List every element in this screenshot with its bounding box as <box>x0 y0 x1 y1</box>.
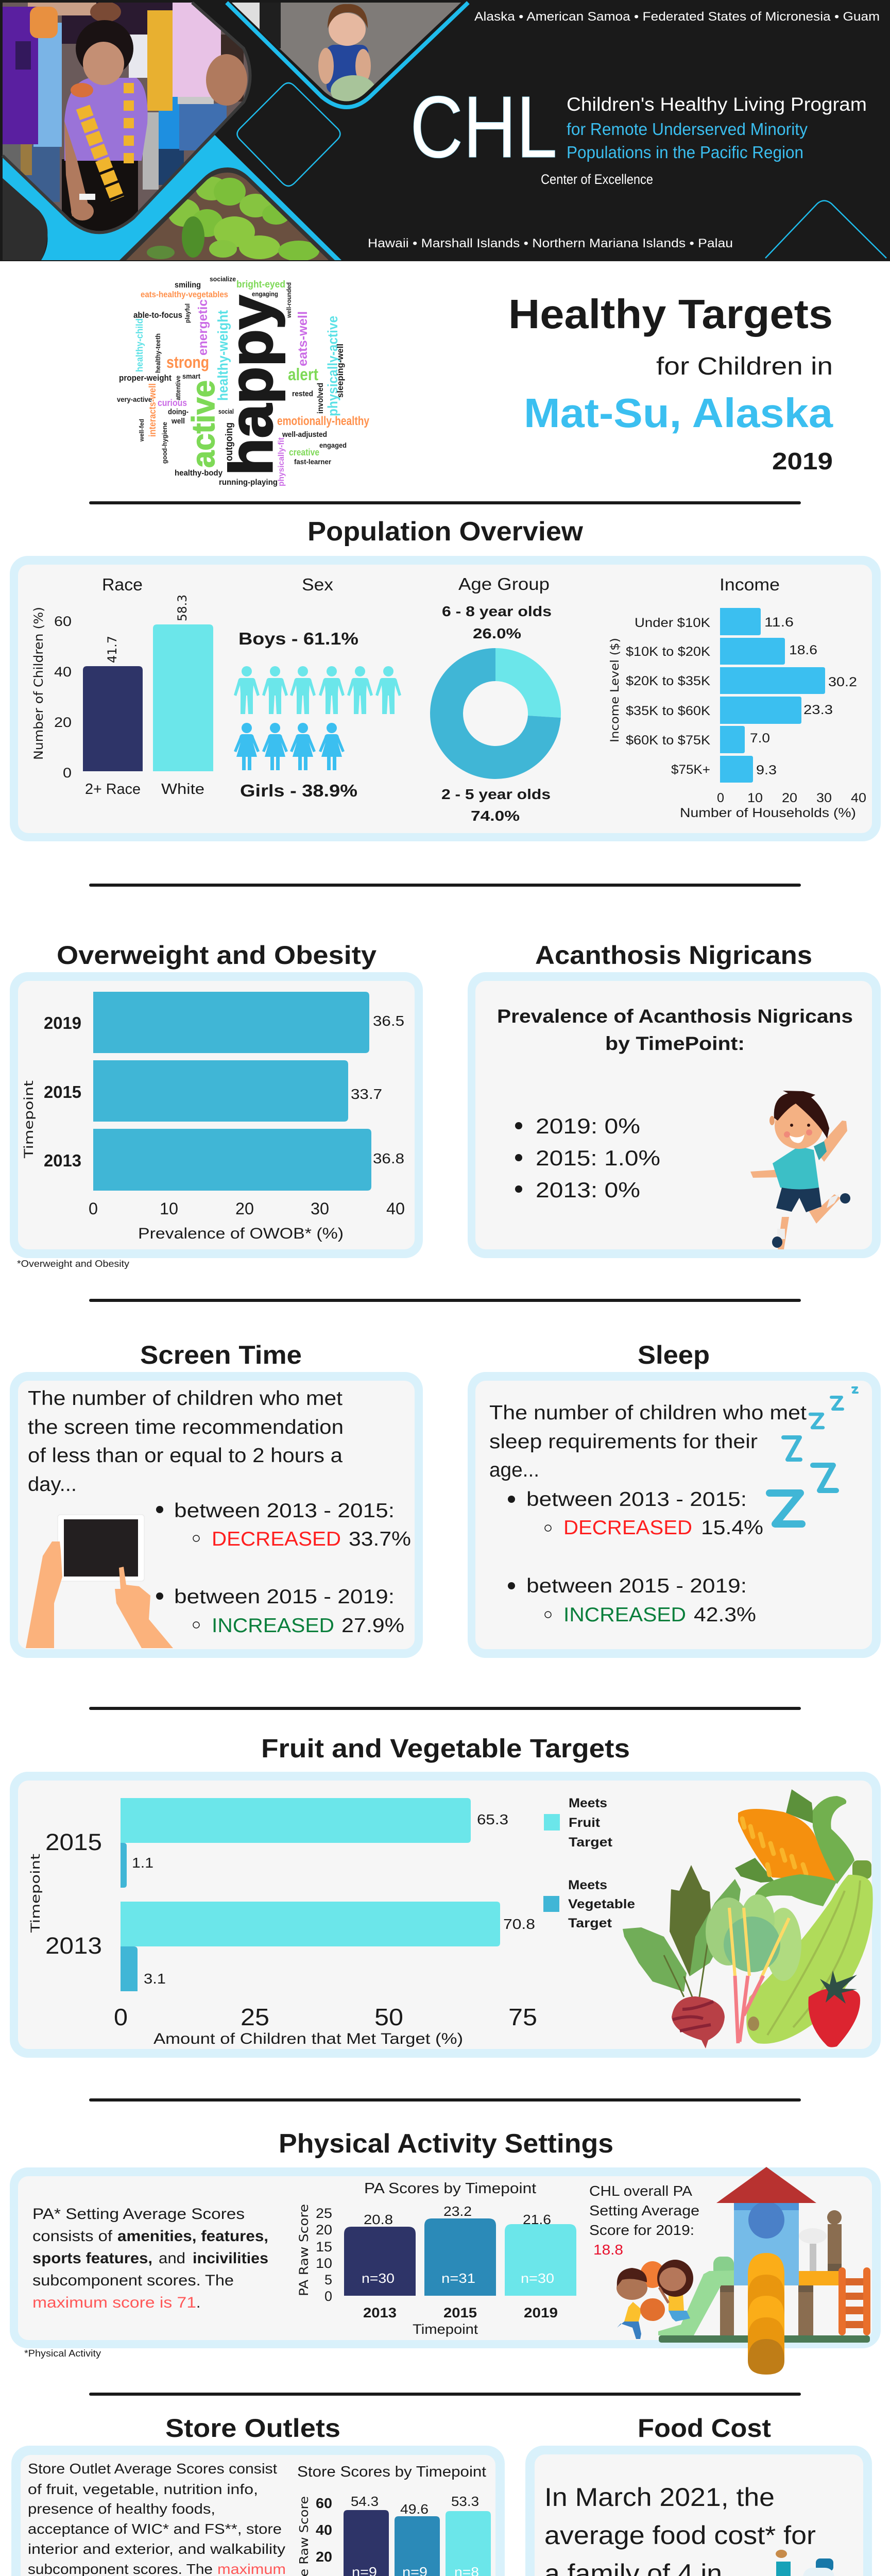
panel: food cost <box>525 2446 883 2576</box>
intro text <box>489 1402 807 1481</box>
bar chart: targets: 1.1 <box>132 1855 153 1871</box>
list: screen time changes: 27.9% <box>341 1615 404 1637</box>
icon: grocery bag <box>741 2550 883 2576</box>
bar chart: PA scores by timepoint: 2015 <box>443 2305 477 2320</box>
heading: Food Cost: Food Cost <box>638 2414 771 2443</box>
chart: race: 41.7 <box>105 636 119 663</box>
panel: store outlets <box>11 2446 505 2576</box>
word cloud: strong <box>166 353 209 371</box>
bar chart: PA scores by timepoint: PA Scores by Timepoint <box>364 2180 536 2197</box>
chart: income: $75K+ <box>671 762 710 777</box>
chart: race: Race <box>102 575 143 594</box>
list: sleep changes: 15.4% <box>701 1517 763 1539</box>
bar chart: store scores by timepoint <box>297 2464 491 2576</box>
word cloud: involved <box>316 383 325 414</box>
bar chart: OWOB prevalence <box>22 992 405 1242</box>
bar chart: PA scores by timepoint: n=30 <box>521 2270 554 2286</box>
chart: age group donut: 2 - 5 year olds <box>441 786 551 802</box>
chart: income: 40 <box>851 791 866 805</box>
chart: income <box>609 575 866 820</box>
chart: income: 30.2 <box>828 675 857 689</box>
bar chart: OWOB prevalence: 30 <box>311 1199 329 1218</box>
panel: physical activity settings <box>10 2167 881 2348</box>
list: screen time changes: 33.7% <box>349 1528 411 1550</box>
title block <box>508 291 833 474</box>
bar chart: targets: 3.1 <box>144 1971 166 1987</box>
legend: Meets <box>568 1878 607 1892</box>
bar chart: PA scores by timepoint: 20 <box>316 2222 332 2238</box>
panel: acanthosis nigricans <box>468 972 881 1258</box>
chart: race <box>31 575 213 798</box>
word cloud: playful <box>184 303 191 323</box>
bar chart: OWOB prevalence: 36.5 <box>373 1013 404 1029</box>
list: sleep changes: 42.3% <box>694 1604 756 1626</box>
word cloud: social <box>218 408 234 415</box>
word cloud: healthy-child <box>134 318 145 372</box>
chart: income: 23.3 <box>803 703 833 717</box>
icon: vegetables and fruit <box>623 1789 873 2048</box>
word cloud: well <box>171 417 185 426</box>
text: store description: of fruit, vegetable, nutrition info, <box>28 2481 258 2497</box>
panel: acanthosis nigricans: by TimePoint: <box>605 1033 745 1054</box>
bar chart: targets: 65.3 <box>477 1811 508 1827</box>
heading: Acanthosis Nigricans: Acanthosis Nigricans <box>535 941 812 970</box>
legend <box>543 1796 635 1930</box>
heading: Overweight and Obesity: Overweight and Obesity <box>57 941 376 970</box>
intro text: of less than or equal to 2 hours a <box>28 1445 343 1467</box>
chart: income: $20K to $35K <box>626 674 710 688</box>
callout: CHL overall PA score: Score for 2019: <box>589 2222 694 2238</box>
word cloud: rested <box>292 389 313 398</box>
list: sleep changes: INCREASED <box>563 1604 686 1626</box>
chart: income: 18.6 <box>789 643 817 657</box>
chart: race: 2+ Race <box>85 781 141 798</box>
text: food cost statement: In March 2021, the <box>544 2483 775 2512</box>
bar chart: PA scores by timepoint: 0 <box>324 2289 332 2304</box>
text: PA description: amenities, features, <box>117 2228 268 2245</box>
text: PA description: subcomponent scores. The <box>32 2272 234 2289</box>
intro text <box>28 1387 344 1496</box>
text: store description: interior and exterior, and walkability <box>28 2541 285 2557</box>
photo: toddler <box>232 3 461 101</box>
chart: race: Number of Children (%) <box>31 607 46 760</box>
word cloud: outgoing <box>224 422 235 461</box>
list: screen time changes: between 2013 - 2015: <box>174 1500 395 1522</box>
chart: income: Number of Households (%) <box>680 806 856 820</box>
heading: Physical Activity Settings: Physical Activity Settings <box>279 2129 613 2159</box>
word cloud: eats-well <box>296 311 310 366</box>
word cloud: physically-fit <box>277 437 286 486</box>
bar chart: OWOB prevalence: 33.7 <box>351 1086 382 1102</box>
word cloud: bright-eyed <box>236 279 285 290</box>
text: PA description: PA* Setting Average Scores <box>32 2206 245 2223</box>
chart: income: Income Level ($) <box>609 638 622 742</box>
callout: CHL overall PA score: Setting Average <box>589 2202 699 2218</box>
footnote: overweight: *Overweight and Obesity <box>17 1259 129 1269</box>
bar chart: OWOB prevalence: Timepoint <box>22 1080 36 1159</box>
chart: age group donut: 74.0% <box>471 808 520 824</box>
header islands top: Alaska • American Samoa • Federated States of Micronesia • Guam <box>474 10 880 24</box>
subtitle: for Children in: for Children in <box>656 353 833 380</box>
word cloud: curious <box>158 398 187 408</box>
legend: Fruit <box>569 1816 601 1830</box>
location: Mat-Su, Alaska: Mat-Su, Alaska <box>524 390 833 436</box>
chart: income: $60K to $75K <box>626 733 710 748</box>
icon: tablet and hands <box>26 1515 173 1648</box>
header islands bottom: Hawaii • Marshall Islands • Northern Mariana Islands • Palau <box>368 236 733 250</box>
heading: Population Overview: Population Overview <box>307 517 584 547</box>
bar chart: targets: 50 <box>374 2004 403 2030</box>
list: sleep changes: between 2015 - 2019: <box>526 1575 747 1597</box>
word cloud: active <box>186 380 221 468</box>
list: sleep changes <box>508 1488 763 1626</box>
icon: sleeping Z letters <box>769 1387 858 1524</box>
bar chart: store scores by timepoint: 54.3 <box>351 2494 379 2509</box>
callout: CHL overall PA score <box>589 2183 699 2258</box>
chart: income: 0 <box>717 791 724 805</box>
legend: Meets <box>569 1796 607 1810</box>
chart: race: 20 <box>54 715 72 730</box>
panel: sleep <box>468 1372 881 1658</box>
bar chart: PA scores by timepoint: 2013 <box>363 2305 397 2320</box>
chart: income: $10K to $20K <box>626 645 710 659</box>
bar chart: targets: 2015 <box>45 1829 102 1855</box>
heading: Sleep: Sleep <box>638 1341 710 1369</box>
list: screen time changes: DECREASED <box>212 1528 341 1550</box>
bar chart: targets: Timepoint <box>28 1854 43 1933</box>
word cloud <box>117 275 370 487</box>
chart: income: 10 <box>747 791 763 805</box>
word cloud: well-rounded <box>285 282 293 318</box>
word cloud: creative <box>289 447 319 457</box>
list: prevalence values: 2019: 0% <box>536 1114 640 1138</box>
bar chart: store scores by timepoint: Store Scores by Timepoint <box>297 2464 486 2480</box>
bar chart: PA scores by timepoint: 15 <box>316 2239 332 2255</box>
word cloud: healthy-weight <box>215 310 231 401</box>
bar chart: PA scores by timepoint: 10 <box>316 2256 332 2271</box>
list: prevalence values: 2013: 0% <box>536 1178 640 1202</box>
word cloud: energetic <box>196 299 210 355</box>
chart: race: 60 <box>54 614 72 629</box>
text: PA description: incivilities <box>193 2250 268 2267</box>
chart: race: 58.3 <box>175 595 190 621</box>
list: screen time changes: between 2015 - 2019: <box>174 1586 395 1608</box>
bar chart: OWOB prevalence: 40 <box>386 1199 405 1218</box>
bar chart: PA scores by timepoint: n=30 <box>362 2270 395 2286</box>
bar chart: PA scores by timepoint: 2019 <box>524 2305 558 2320</box>
word cloud: healthy-teeth <box>154 333 162 373</box>
word cloud: emotionally-healthy <box>277 414 370 428</box>
text: PA description: . <box>196 2294 200 2311</box>
callout: CHL overall PA score: 18.8 <box>593 2242 623 2258</box>
word cloud: interacts-well <box>147 383 158 437</box>
chart: race: White <box>161 781 204 798</box>
word cloud: very-active <box>117 395 152 403</box>
word cloud: fast-learner <box>294 457 332 466</box>
chart: sex <box>234 575 401 800</box>
word cloud: well-fed <box>138 419 145 442</box>
word cloud: alert <box>288 365 318 384</box>
intro text: sleep requirements for their <box>489 1431 758 1453</box>
list: prevalence values <box>515 1114 660 1202</box>
word cloud: proper-weight <box>119 373 172 383</box>
program subtitle line 1: for Remote Underserved Minority <box>567 120 808 139</box>
icon: playground with children <box>617 2167 870 2375</box>
bar chart: targets: 25 <box>241 2004 269 2030</box>
icon: diamond outline <box>237 83 340 186</box>
icon: boys <box>234 666 401 714</box>
icon: girls <box>234 723 345 770</box>
word cloud: able-to-focus <box>133 310 182 320</box>
word cloud: smart <box>182 372 200 380</box>
photo: lettuce garden <box>119 167 335 260</box>
bar chart: PA scores by timepoint: PA Raw Score <box>297 2204 311 2296</box>
program subtitle line 2: Populations in the Pacific Region <box>567 143 803 162</box>
chart: age group donut: 6 - 8 year olds <box>442 603 552 619</box>
legend: Target <box>568 1916 612 1930</box>
word cloud: sleeping-well <box>335 344 345 398</box>
word cloud: happy <box>217 295 285 476</box>
text: store description <box>28 2461 286 2576</box>
word cloud: engaging <box>252 290 278 298</box>
chart: income: 7.0 <box>750 731 770 745</box>
list: sleep changes: between 2013 - 2015: <box>526 1488 747 1511</box>
heading: Screen Time: Screen Time <box>140 1341 302 1369</box>
chart: income: 11.6 <box>764 615 794 630</box>
panel heading: Prevalence of Acanthosis Nigricans <box>497 1006 853 1027</box>
bar chart: PA scores by timepoint: n=31 <box>441 2270 475 2286</box>
bar chart: OWOB prevalence: 0 <box>89 1199 98 1218</box>
panel: overweight and obesity <box>10 972 423 1258</box>
chart: income: 9.3 <box>756 763 777 777</box>
bar chart: targets: 2013 <box>45 1933 102 1959</box>
bar chart: OWOB prevalence: 2019 <box>44 1013 81 1032</box>
panel: population overview <box>10 556 881 841</box>
text: store description: acceptance of WIC* and FS**, store <box>28 2521 282 2537</box>
bar chart: OWOB prevalence: 2015 <box>44 1082 81 1101</box>
word cloud: socialize <box>210 275 236 283</box>
legend: Target <box>569 1835 613 1850</box>
bar chart: OWOB prevalence: 2013 <box>44 1151 81 1170</box>
chart: age group donut <box>430 574 561 824</box>
bar chart: PA scores by timepoint: 21.6 <box>523 2212 551 2227</box>
footnote: physical activity: *Physical Activity <box>24 2348 101 2359</box>
word cloud: attentive <box>174 376 182 400</box>
word cloud: engaged <box>319 441 347 449</box>
chart: income: Under $10K <box>635 616 710 630</box>
word cloud: healthy-body <box>175 469 222 478</box>
bar chart: targets: 0 <box>114 2004 128 2030</box>
bar chart: PA scores by timepoint: 5 <box>324 2272 332 2287</box>
word cloud: doing- <box>168 408 189 416</box>
chart: income: 30 <box>816 791 832 805</box>
text: store description: Store Outlet Average Scores consist <box>28 2461 277 2477</box>
bar chart: targets <box>28 1798 537 2047</box>
heading: Fruit and Vegetable Targets: Fruit and Vegetable Targets <box>261 1734 630 1763</box>
text: food cost statement <box>544 2483 816 2576</box>
word cloud: eats-healthy-vegetables <box>141 290 228 299</box>
word cloud: well-adjusted <box>282 430 327 439</box>
panel: fruit and vegetable targets <box>10 1772 881 2058</box>
header banner <box>0 0 890 263</box>
text: PA description: and <box>159 2250 185 2267</box>
text: store description: presence of healthy foods, <box>28 2501 215 2517</box>
bar chart: PA scores by timepoint: 25 <box>316 2206 332 2221</box>
bar chart: OWOB prevalence: 10 <box>160 1199 178 1218</box>
list: prevalence values: 2015: 1.0% <box>536 1146 660 1170</box>
bar chart: store scores by timepoint: 49.6 <box>400 2501 429 2517</box>
bar chart: store scores by timepoint: 20 <box>316 2549 332 2565</box>
center of excellence: Center of Excellence <box>541 172 653 187</box>
list: sleep changes: DECREASED <box>563 1517 692 1539</box>
word cloud: running-playing <box>219 478 278 487</box>
bar chart: store scores by timepoint: 53.3 <box>451 2494 479 2509</box>
program name: Children's Healthy Living Program <box>567 94 867 115</box>
chart: sex: Sex <box>302 575 334 594</box>
text: PA description <box>32 2206 268 2311</box>
bar chart: store scores by timepoint: 60 <box>316 2495 332 2511</box>
word cloud: physically-active <box>325 316 340 416</box>
word cloud: good-hygiene <box>161 422 168 464</box>
chart: sex: Girls - 38.9% <box>240 781 357 800</box>
legend: Vegetable <box>568 1897 635 1911</box>
bar chart: targets: 75 <box>508 2004 537 2030</box>
list: screen time changes: INCREASED <box>212 1615 334 1637</box>
chart: income: 20 <box>782 791 797 805</box>
intro text: The number of children who met <box>28 1387 343 1410</box>
bar chart: PA scores by timepoint: Timepoint <box>413 2321 478 2337</box>
intro text: age... <box>489 1459 539 1481</box>
chart: sex: Boys - 61.1% <box>238 629 358 648</box>
intro text: day... <box>28 1473 77 1496</box>
text: PA description: consists of <box>32 2228 113 2245</box>
logo CHL: CHL <box>410 78 557 176</box>
text: food cost statement: average food cost* for <box>544 2521 816 2550</box>
title: Healthy Targets: Healthy Targets <box>508 291 833 337</box>
intro text: the screen time recommendation <box>28 1416 344 1438</box>
bar chart: OWOB prevalence: Prevalence of OWOB* (%) <box>138 1225 344 1242</box>
chart: race: 40 <box>54 664 72 680</box>
cyan shape <box>3 135 341 260</box>
bar chart: PA scores by timepoint <box>297 2180 576 2337</box>
icon: running boy <box>750 1091 850 1249</box>
word cloud: smiling <box>175 281 201 290</box>
bar chart: OWOB prevalence: 20 <box>235 1199 254 1218</box>
chart: age group donut: 26.0% <box>473 625 521 641</box>
bar chart: OWOB prevalence: 36.8 <box>373 1150 404 1166</box>
icon: triangle outline <box>765 201 886 258</box>
panel: screen time <box>10 1372 423 1658</box>
photo: girl with leis <box>0 0 258 237</box>
list: screen time changes <box>156 1500 411 1637</box>
bar chart: PA scores by timepoint: 23.2 <box>443 2204 472 2219</box>
chart: age group donut: Age Group <box>458 574 550 594</box>
bar chart: store scores by timepoint: 40 <box>316 2522 332 2538</box>
text: PA description: sports features, <box>32 2250 152 2267</box>
chart: income: Income <box>720 575 780 594</box>
text: PA description: maximum score is 71 <box>32 2294 196 2311</box>
bar chart: targets: Amount of Children that Met Target (%) <box>153 2030 463 2047</box>
bar chart: targets: 70.8 <box>503 1916 535 1932</box>
heading: Store Outlets: Store Outlets <box>165 2414 340 2443</box>
callout: CHL overall PA score: CHL overall PA <box>589 2183 692 2199</box>
year: 2019 <box>772 448 833 474</box>
chart: income: $35K to $60K <box>626 704 710 718</box>
chart: race: 0 <box>63 765 72 781</box>
bar chart: PA scores by timepoint: 20.8 <box>364 2212 393 2227</box>
intro text: The number of children who met <box>489 1402 807 1424</box>
